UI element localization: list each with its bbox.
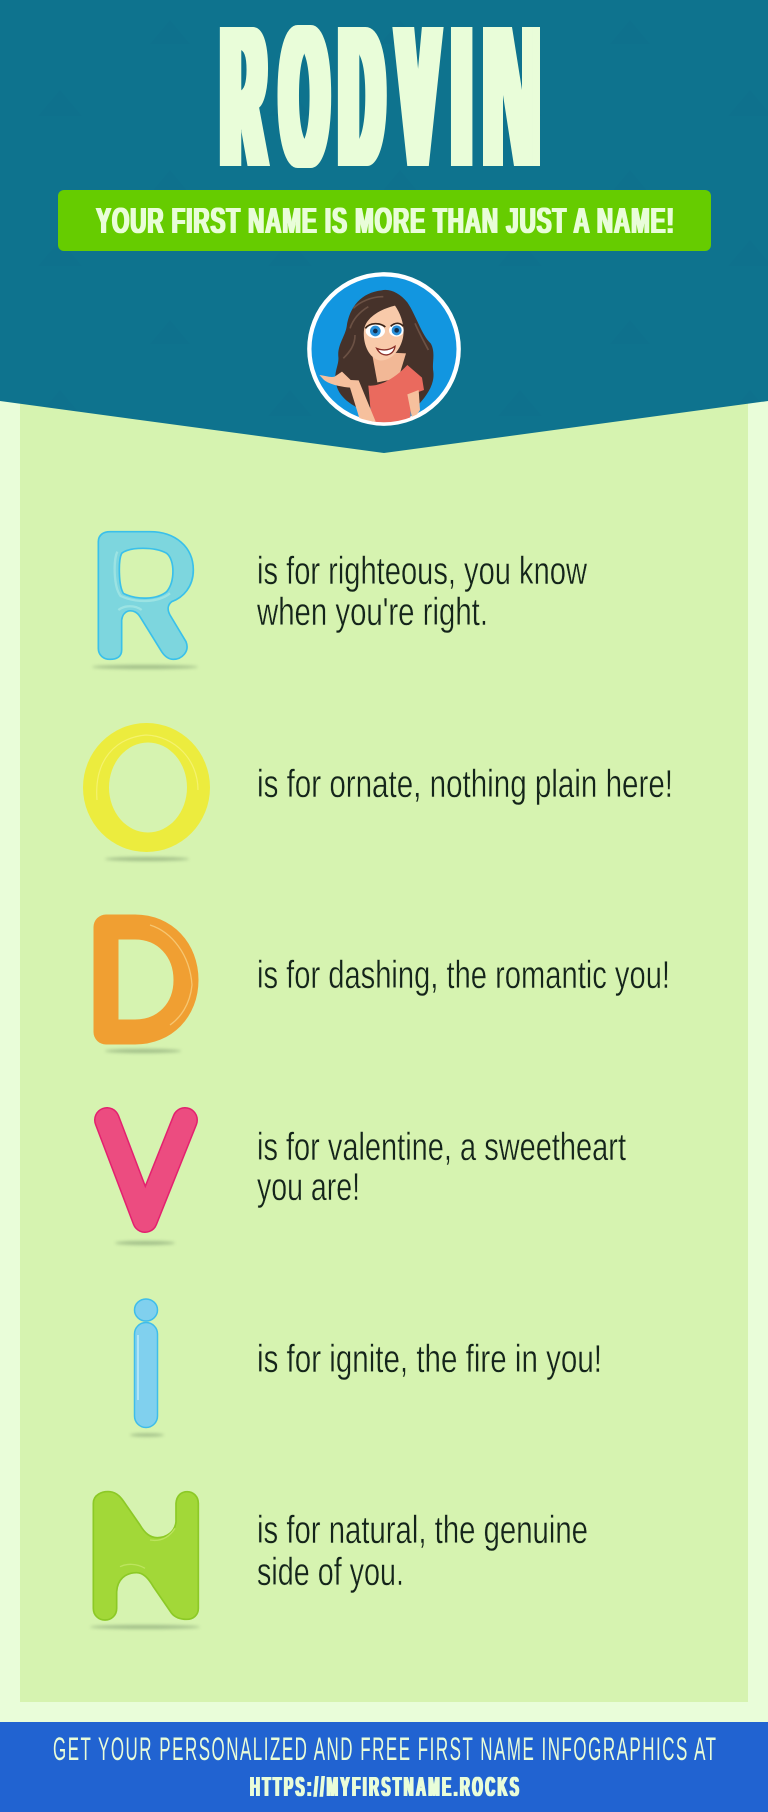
row 5: text: is for ignite, the fire in you! [257,1338,602,1381]
header panel [0,0,768,453]
row 1: letter R [92,532,198,669]
row 4: text: you are! [257,1166,360,1209]
row 2: letter O [83,723,210,861]
row 1: text: when you're right. [256,591,488,634]
banner text: YOUR FIRST NAME IS MORE THAN JUST A NAME! [96,202,674,241]
row 6: text [257,1509,588,1594]
row 1: text [256,550,588,634]
row 6: letter N [90,1492,200,1629]
row 4: text [257,1126,626,1209]
panel: letters background [20,380,748,1702]
row 3: letter D [105,925,192,1053]
footer line 1: GET YOUR PERSONALIZED AND FREE FIRST NAME INFOGRAPHICS AT [53,1733,716,1767]
row 6: text: is for natural, the genuine [257,1509,588,1552]
footer [0,1722,768,1812]
avatar badge [309,274,459,424]
banner [58,190,711,251]
row 1: text: is for righteous, you know [257,550,588,593]
row 4: letter V [107,1120,185,1245]
row 6: text: side of you. [257,1551,404,1594]
row 5: letter i [130,1299,164,1437]
footer link: HTTPS://MYFIRSTNAME.ROCKS [250,1771,519,1802]
row 4: text: is for valentine, a sweetheart [257,1126,626,1169]
